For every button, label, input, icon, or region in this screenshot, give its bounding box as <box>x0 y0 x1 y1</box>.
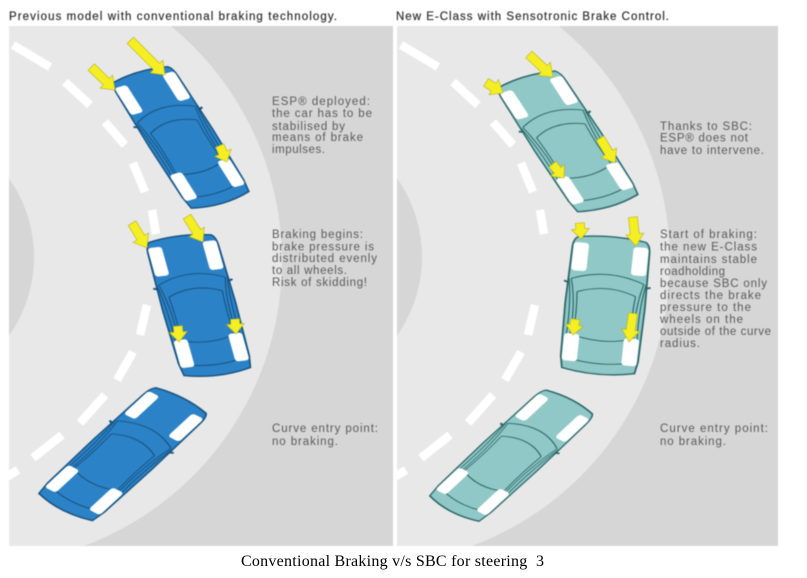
text: start of braking: roadholding <box>660 266 725 278</box>
text: start of braking: Start of braking: <box>660 229 757 241</box>
text: ESP deployed: stabilised by <box>272 121 345 133</box>
road background: SBC <box>396 26 778 546</box>
text: curve entry, SBC: Curve entry point: <box>660 423 768 435</box>
text: start of braking: maintains stable <box>660 254 757 266</box>
text: curve entry, SBC: no braking. <box>660 436 726 448</box>
text: thanks to SBC: have to intervene. <box>660 145 764 157</box>
road background: conventional <box>0 0 393 565</box>
text: braking begins: distributed evenly <box>272 253 377 265</box>
car: curve entry, blue <box>31 382 215 526</box>
text: braking begins: Risk of skidding! <box>272 277 367 289</box>
car: start of braking, teal <box>554 233 656 378</box>
text: start of braking: radius. <box>660 338 700 350</box>
text: start of braking: wheels on the <box>659 314 743 326</box>
text: curve entry, conventional <box>272 423 378 448</box>
arrows: brake force, conventional <box>85 34 245 343</box>
text: start of braking: the new E-Class <box>660 242 757 254</box>
panel title: conventional: Previous model with conventional braking technology. <box>9 11 337 23</box>
text: braking begins: brake pressure is <box>272 242 374 254</box>
text: start of braking: because SBC only <box>660 278 767 290</box>
car: ESP deployed, blue <box>105 62 257 213</box>
text: curve entry, SBC <box>660 423 768 448</box>
text: braking begins: Braking begins: <box>272 229 363 241</box>
text: thanks to SBC: Thanks to SBC: <box>660 121 752 133</box>
text: braking begins: to all wheels. <box>272 265 347 277</box>
text: curve entry, conventional: Curve entry point: <box>272 423 378 435</box>
text: ESP deployed <box>272 96 372 156</box>
text: start of braking: outside of the curve <box>660 326 771 338</box>
text: braking begins <box>272 229 377 289</box>
text: thanks to SBC: ESP® does not <box>660 132 749 144</box>
text: thanks to SBC <box>660 121 764 157</box>
car: braking begins, blue <box>140 231 258 380</box>
text: ESP deployed: the car has to be <box>272 108 372 120</box>
panel: previous model with conventional braking <box>0 0 393 565</box>
arrows: brake force, SBC <box>481 48 645 343</box>
text: curve entry, conventional: no braking. <box>272 436 338 448</box>
text: ESP deployed: ESP® deployed: <box>272 96 370 108</box>
car: curve entry, teal <box>422 385 601 527</box>
panel: new E-Class with Sensotronic Brake Control <box>396 10 778 546</box>
text: start of braking: pressure to the <box>660 302 751 314</box>
text: ESP deployed: impulses. <box>272 144 325 156</box>
text: start of braking <box>659 229 771 350</box>
car: SBC no ESP needed, teal <box>490 66 646 217</box>
text: start of braking: directs the brake <box>660 290 761 302</box>
text: ESP deployed: means of brake <box>272 132 363 144</box>
caption: Conventional Braking v/s SBC for steering 3 <box>241 553 544 570</box>
panel title: SBC: New E-Class with Sensotronic Brake Control. <box>396 11 669 23</box>
